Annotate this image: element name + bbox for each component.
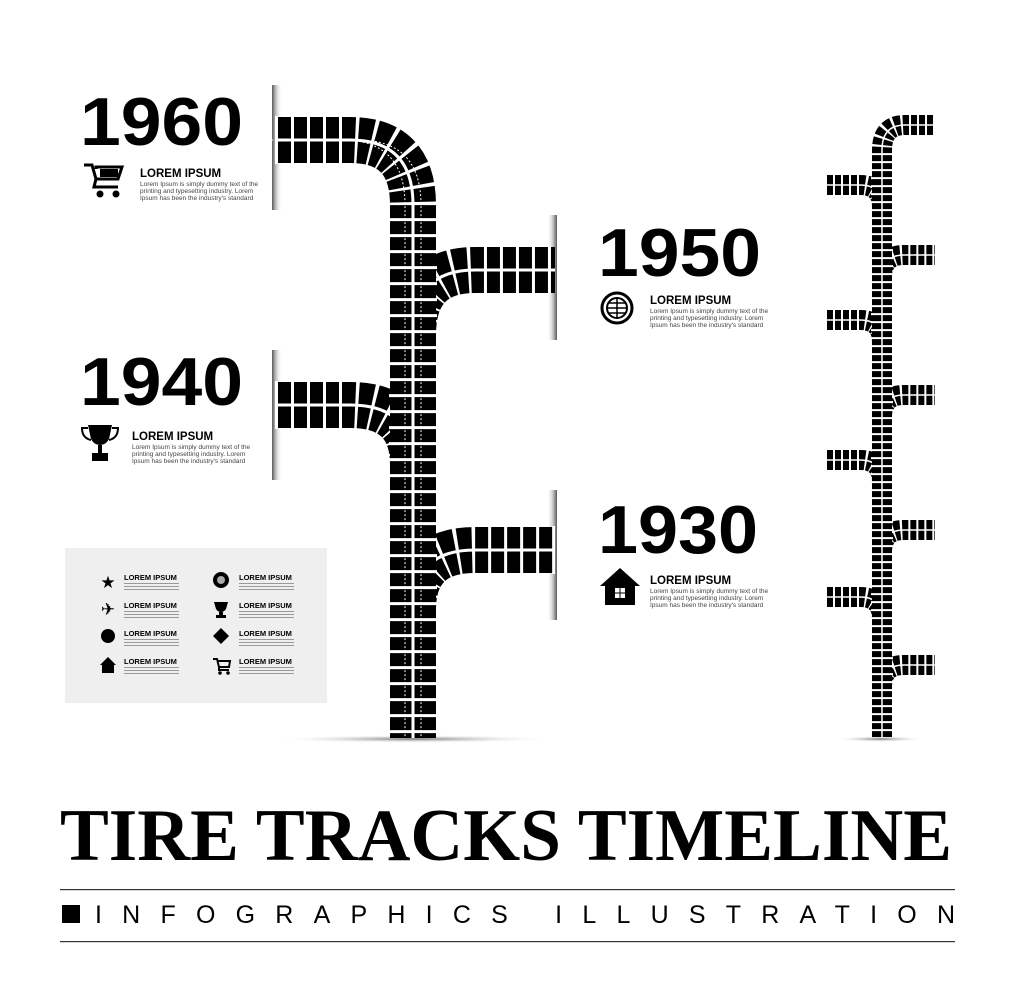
shadow strips bbox=[272, 85, 925, 743]
block 1930 bbox=[598, 492, 769, 609]
panel: icon legend: LOREM IPSUM bbox=[239, 601, 292, 610]
panel: icon legend: LOREM IPSUM bbox=[124, 657, 177, 666]
icon: trophy bbox=[82, 425, 118, 461]
panel: icon legend bbox=[65, 548, 327, 703]
panel: icon legend: LOREM IPSUM bbox=[124, 601, 177, 610]
panel: icon legend: LOREM IPSUM bbox=[239, 573, 292, 582]
main tire track tree bbox=[267, 140, 555, 738]
block 1950 bbox=[598, 215, 769, 329]
panel: icon legend: LOREM IPSUM bbox=[124, 573, 177, 582]
panel: icon legend: LOREM IPSUM bbox=[239, 657, 292, 666]
block 1950: Ipsum has been the industry's standard bbox=[650, 322, 764, 329]
panel: icon legend: LOREM IPSUM bbox=[124, 629, 177, 638]
icon: cart bbox=[84, 165, 122, 198]
icon: globe bbox=[602, 293, 632, 323]
block 1940: Lorem Ipsum is simply dummy text of the bbox=[132, 444, 251, 451]
title: TIRE TRACKS TIMELINE bbox=[60, 795, 952, 877]
block 1930: Ipsum has been the industry's standard bbox=[650, 602, 764, 609]
block 1940: 1940 bbox=[80, 344, 243, 420]
block 1950: printing and typesetting industry. Lorem bbox=[650, 315, 763, 322]
right small tire track tree bbox=[825, 125, 935, 738]
block 1930: Lorem Ipsum is simply dummy text of the bbox=[650, 588, 769, 595]
panel: icon legend: ★ bbox=[100, 573, 116, 592]
block 1930: printing and typesetting industry. Lorem bbox=[650, 595, 763, 602]
block 1960: Lorem Ipsum is simply dummy text of the bbox=[140, 181, 259, 188]
panel: icon legend: ✈ bbox=[101, 600, 115, 619]
icon: house bbox=[600, 568, 640, 605]
block 1960: printing and typesetting industry. Lorem bbox=[140, 188, 253, 195]
block 1940: LOREM IPSUM bbox=[132, 431, 213, 443]
block 1960 bbox=[80, 84, 259, 202]
block 1930: 1930 bbox=[598, 492, 758, 568]
subtitle bbox=[60, 889, 955, 942]
block 1940 bbox=[80, 344, 251, 465]
block 1960: Ipsum has been the industry's standard bbox=[140, 195, 254, 202]
block 1950: LOREM IPSUM bbox=[650, 295, 731, 307]
block 1950: 1950 bbox=[598, 215, 761, 291]
panel: icon legend: LOREM IPSUM bbox=[239, 629, 292, 638]
block 1930: LOREM IPSUM bbox=[650, 575, 731, 587]
block 1940: printing and typesetting industry. Lorem bbox=[132, 451, 245, 458]
block 1960: 1960 bbox=[80, 84, 243, 160]
block 1940: Ipsum has been the industry's standard bbox=[132, 458, 246, 465]
block 1960: LOREM IPSUM bbox=[140, 168, 221, 180]
block 1950: Lorem Ipsum is simply dummy text of the bbox=[650, 308, 769, 315]
subtitle: INFOGRAPHICS ILLUSTRATION bbox=[95, 901, 955, 929]
